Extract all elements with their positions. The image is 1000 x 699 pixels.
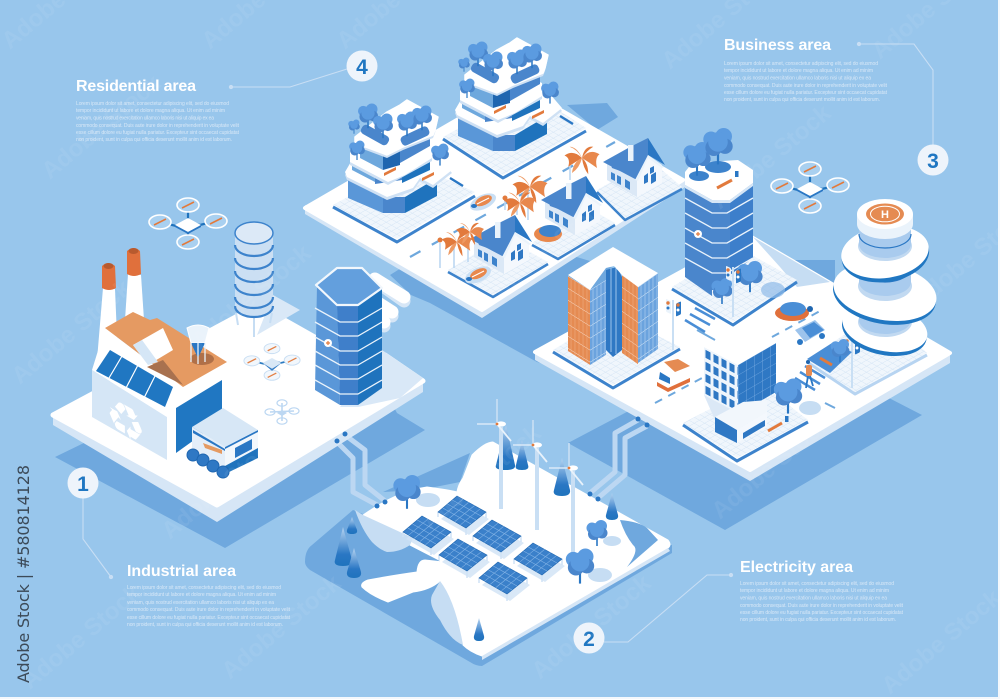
stock watermark: Adobe Stock xyxy=(17,579,147,695)
text block: electricity area xyxy=(740,581,904,623)
conifer trees xyxy=(335,425,618,641)
text block: business area: tempor incididunt ut labore et dolore magna aliqua. Ut enim ad minim xyxy=(724,68,873,74)
stock watermark: Adobe Stock xyxy=(417,419,547,535)
stock watermark: Adobe Stock xyxy=(707,409,837,525)
text block: industrial area: esse cillum dolore eu fugiat nulla pariatur. Excepteur sint occaecat cupidatat xyxy=(127,615,291,621)
text block: electricity area: tempor incididunt ut labore et dolore magna aliqua. Ut enim ad minim xyxy=(740,588,889,594)
road markings xyxy=(410,142,615,257)
stock id sidebar: Adobe Stock | #580814128 xyxy=(14,465,33,683)
heading: electricity area: Electricity area xyxy=(740,559,853,576)
solar roof panels xyxy=(96,350,173,407)
panel: business area xyxy=(535,128,950,481)
heading: business area: Business area xyxy=(724,37,831,54)
octagonal tank xyxy=(315,268,382,405)
stock watermark: Adobe Stock xyxy=(157,429,287,545)
text block: electricity area: commodo consequat. Duis aute irure dolor in reprehenderit in voluptate velit xyxy=(740,603,904,609)
chimneys xyxy=(97,248,144,360)
text block: business area: commodo consequat. Duis aute irure dolor in reprehenderit in voluptate velit xyxy=(724,83,888,89)
bench garden xyxy=(807,339,852,373)
stock watermark: Adobe Stock xyxy=(217,569,347,685)
number badge 1 xyxy=(68,468,98,498)
pipe caps xyxy=(636,416,650,428)
text block: electricity area: Lorem ipsum dolor sit amet, consectetur adipiscing elit, sed do eiusmod xyxy=(740,581,894,587)
leader line: electricity xyxy=(604,573,733,642)
heading: industrial area: Industrial area xyxy=(127,563,236,580)
helipad tower xyxy=(828,199,941,363)
silo xyxy=(235,222,273,337)
round trees xyxy=(393,475,621,584)
text block: business area xyxy=(724,61,888,103)
traffic lights xyxy=(666,266,860,388)
tower shadow on platform xyxy=(753,237,830,287)
text block: residential area xyxy=(76,101,240,143)
text block: residential area: esse cillum dolore eu fugiat nulla pariatur. Excepteur sint occaecat cupidatat xyxy=(76,130,240,136)
text block: residential area: Lorem ipsum dolor sit amet, consectetur adipiscing elit, sed do eiusmod xyxy=(76,101,229,107)
text block: industrial area: veniam, quis nostrud exercitation ullamco laboris nisi ut aliquip ex ea xyxy=(127,600,274,606)
number badge 1: 1 xyxy=(77,473,89,496)
stock watermark: Adobe Stock xyxy=(7,274,137,390)
text block: electricity area: non proident, sunt in culpa qui officia deserunt mollit anim id est laborum. xyxy=(740,617,896,623)
tank shadow xyxy=(340,350,423,407)
text block: business area: veniam, quis nostrud exercitation ullamco laboris nisi ut aliquip ex ea xyxy=(724,76,871,82)
text block: industrial area: commodo consequat. Duis aute irure dolor in reprehenderit in voluptate velit xyxy=(127,607,291,613)
leader line: business xyxy=(857,42,933,146)
paved pads xyxy=(333,90,682,297)
number badge 2: 2 xyxy=(583,628,595,651)
text block: electricity area: veniam, quis nostrud exercitation ullamco laboris nisi ut aliquip ex ea xyxy=(740,596,887,602)
wind turbines xyxy=(477,399,583,553)
stock watermark: Adobe Stock xyxy=(487,189,617,305)
panel: residential area xyxy=(305,38,685,318)
ground shadows under platforms xyxy=(55,103,922,548)
text block: electricity area: esse cillum dolore eu fugiat nulla pariatur. Excepteur sint occaecat cupidatat xyxy=(740,610,904,616)
flying drone: industrial xyxy=(149,198,227,249)
solar panels xyxy=(403,496,565,601)
drones on platform xyxy=(244,344,300,424)
business vehicles and person xyxy=(657,302,825,392)
stock watermark: Adobe Stock xyxy=(707,99,837,215)
text block: industrial area: Lorem ipsum dolor sit amet, consectetur adipiscing elit, sed do eiusmod xyxy=(127,585,281,591)
pipe caps xyxy=(374,492,600,508)
heading: residential area: Residential area xyxy=(76,78,196,95)
road markings and crosswalks xyxy=(655,308,835,408)
leader line: industrial xyxy=(83,497,113,579)
terrain base xyxy=(305,510,672,666)
pipe caps xyxy=(334,432,348,444)
paved pads xyxy=(553,247,927,461)
text block: industrial area: non proident, sunt in culpa qui officia deserunt mollit anim id est laborum. xyxy=(127,622,283,628)
hills xyxy=(355,510,413,552)
orange building xyxy=(568,247,658,365)
factory building xyxy=(92,312,227,461)
number badge 3 xyxy=(918,144,948,176)
text block: business area: non proident, sunt in culpa qui officia deserunt mollit anim id est laborum. xyxy=(724,97,880,103)
stock watermark: Adobe Stock xyxy=(527,569,657,685)
recycling sign: ♻ xyxy=(106,385,145,459)
text block: residential area: non proident, sunt in culpa qui officia deserunt mollit anim id est laborum. xyxy=(76,137,232,143)
cars xyxy=(462,190,562,287)
text block: industrial area xyxy=(127,585,291,628)
text block: industrial area: tempor incididunt ut labore et dolore magna aliqua. Ut enim ad minim xyxy=(127,592,276,598)
number badge 4: 4 xyxy=(356,56,368,79)
lower office building xyxy=(704,325,821,443)
leader line: residential xyxy=(229,69,347,89)
platform fingers xyxy=(375,279,404,326)
panel: industrial area xyxy=(53,222,423,522)
terrain white xyxy=(362,442,670,656)
blue tower xyxy=(683,128,785,304)
delivery robot xyxy=(187,408,258,478)
rooftop hopper xyxy=(190,353,214,365)
number badge 4 xyxy=(346,50,378,82)
apartment building back xyxy=(455,38,573,151)
helipad tower: H xyxy=(881,209,889,221)
platform xyxy=(535,350,950,481)
platform xyxy=(53,382,423,522)
apartment building front xyxy=(345,100,463,213)
flying drone: business xyxy=(771,162,849,213)
text block: residential area: commodo consequat. Duis aute irure dolor in reprehenderit in voluptate velit xyxy=(76,123,240,129)
text block: residential area: tempor incididunt ut labore et dolore magna aliqua. Ut enim ad minim xyxy=(76,108,225,114)
pipes between platforms xyxy=(337,420,647,505)
stock watermark: Adobe Stock xyxy=(37,69,167,185)
panel: electricity area xyxy=(305,399,672,666)
houses xyxy=(470,138,665,274)
number badge 3: 3 xyxy=(927,150,939,173)
platform xyxy=(305,178,685,318)
stock watermark: Adobe Stock xyxy=(187,239,317,355)
number badge 2 xyxy=(574,622,604,654)
text block: residential area: veniam, quis nostrud exercitation ullamco laboris nisi ut aliquip ex ea xyxy=(76,116,214,122)
text block: business area: Lorem ipsum dolor sit amet, consectetur adipiscing elit, sed do eiusmod xyxy=(724,61,878,67)
palms and lamps xyxy=(438,147,600,268)
text block: business area: esse cillum dolore eu fugiat nulla pariatur. Excepteur sint occaecat cupidatat xyxy=(724,90,888,96)
